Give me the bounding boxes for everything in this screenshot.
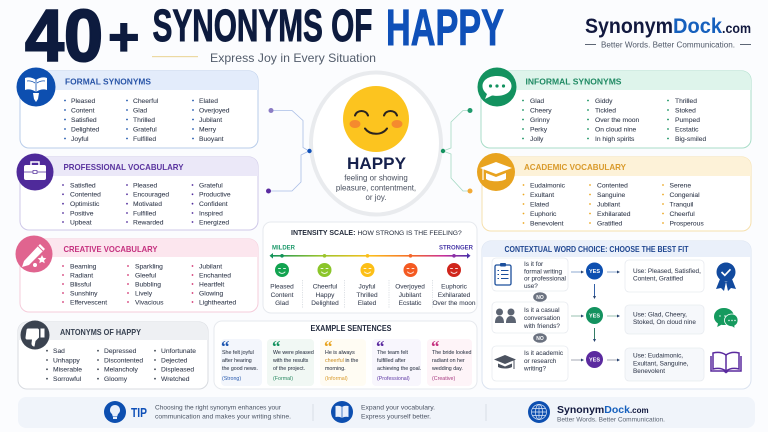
word list: creative: Enchanted xyxy=(199,272,231,279)
word list: academic: Contented xyxy=(597,182,628,189)
connector lines: left xyxy=(266,108,312,194)
word list: professional: Pleased xyxy=(133,182,157,189)
word list: formal: Delighted xyxy=(71,126,100,133)
flow arrows xyxy=(571,270,620,362)
word list: professional: Satisfied xyxy=(70,182,96,189)
word list: creative: Glowing xyxy=(199,290,223,297)
word list: formal: Pleased xyxy=(71,98,95,105)
sentence card: informal xyxy=(320,337,366,386)
panel: academic vocabulary xyxy=(477,153,751,231)
sentence card: strong xyxy=(221,337,262,386)
sentence card: strong: “ xyxy=(221,337,230,356)
panel: contextual word choice xyxy=(482,241,751,389)
heading: creative vocabulary: CREATIVE VOCABULARY xyxy=(64,245,158,254)
word list: academic: Sanguine xyxy=(597,192,626,199)
word list: informal: Tickled xyxy=(595,107,616,114)
word list: formal: Satisfied xyxy=(71,117,97,124)
word list: informal: Stoked xyxy=(675,107,696,114)
intensity words xyxy=(270,284,476,307)
word list: formal: Fulfilled xyxy=(133,136,156,143)
question text: Is it a casual xyxy=(524,307,560,314)
result text: Benevolent xyxy=(633,368,665,375)
result text xyxy=(633,268,701,375)
word list: creative: Sunshiny xyxy=(70,290,98,297)
sentence card: professional: (Professional) xyxy=(377,376,410,382)
gradient scale line xyxy=(270,253,470,259)
word list: antonyms: Discontented xyxy=(104,357,143,364)
heading: professional vocabulary: PROFESSIONAL VOCABULARY xyxy=(64,163,184,172)
word list: creative: Blissful xyxy=(70,281,92,288)
sentence card: formal: (Formal) xyxy=(273,376,293,382)
result text: Stoked, On cloud nine xyxy=(633,319,696,326)
word list: formal: Thrilled xyxy=(133,117,155,124)
result text: Use: Pleased, Satisfied, xyxy=(633,268,701,275)
icon: people xyxy=(495,308,516,323)
sentence card: informal: He is always xyxy=(325,350,355,356)
intensity words: Glad xyxy=(275,300,289,307)
sentence card: creative: radiant on her xyxy=(432,358,465,364)
word list: creative: Lighthearted xyxy=(199,299,236,306)
icon: pencil and stars xyxy=(16,236,52,272)
panel: informal synonyms xyxy=(478,68,751,148)
footer logo: Better Words. Better Communication. xyxy=(557,416,665,424)
word list: professional: Upbeat xyxy=(70,219,92,226)
footer logo xyxy=(528,401,665,424)
expand your vocabulary: Expand your vocabulary. xyxy=(361,404,435,412)
intensity words: Ecstatic xyxy=(399,300,422,307)
icon: medal xyxy=(716,262,736,291)
title: synonyms of happy: SYNONYMS OF xyxy=(152,0,372,51)
word list: informal: Over the moon xyxy=(595,117,640,124)
word list: antonyms: Sorrowful xyxy=(53,376,82,383)
word list: informal xyxy=(523,98,706,143)
tip: communication and makes your writing shine. xyxy=(155,414,291,420)
word list: creative: Beaming xyxy=(70,263,97,270)
sentence card: informal: morning. xyxy=(325,366,346,372)
icon: thumbs down xyxy=(20,320,50,350)
word list: antonyms: Unhappy xyxy=(53,357,80,364)
icon: chat bubbles xyxy=(714,308,738,329)
word list: formal: Overjoyed xyxy=(199,107,230,114)
definition: or joy. xyxy=(366,193,386,202)
word list: antonyms: Depressed xyxy=(104,348,137,355)
word list: formal: Cheerful xyxy=(133,98,159,105)
tip: Choosing the right synonym enhances your xyxy=(155,404,282,412)
sentence card: strong: after hearing xyxy=(222,358,252,364)
word list: antonyms: Unfortunate xyxy=(161,348,196,355)
word list: informal: Jolly xyxy=(530,136,544,143)
question text: or professional xyxy=(524,276,566,282)
word list: academic: Jubilant xyxy=(597,201,620,208)
intensity words: Happy xyxy=(316,292,335,299)
center circle: happy xyxy=(311,72,441,214)
sentence card: professional: The team felt xyxy=(377,350,408,356)
icon: speech bubble xyxy=(478,68,516,106)
word list: formal: Content xyxy=(71,107,95,114)
word list: academic: Benevolent xyxy=(530,220,564,227)
sentence card: professional xyxy=(372,337,421,386)
word list: creative: Gleeful xyxy=(135,272,157,279)
word list: informal: On cloud nine xyxy=(595,126,637,133)
word list: academic: Serene xyxy=(670,182,691,189)
result text: Use: Eudaimonic, xyxy=(633,352,683,360)
word list: formal: Glad xyxy=(133,107,147,114)
tip xyxy=(104,401,291,423)
icon: open book xyxy=(16,68,56,106)
intensity words: Jubilant xyxy=(399,292,421,299)
word list: academic: Euphoric xyxy=(530,211,557,218)
word list: formal: Buoyant xyxy=(199,136,224,143)
question text xyxy=(523,261,566,372)
heading: academic vocabulary: ACADEMIC VOCABULARY xyxy=(524,163,627,172)
word list: professional xyxy=(63,182,231,226)
intensity words: Pleased xyxy=(270,284,294,290)
definition xyxy=(336,174,416,202)
sentence card: formal: We were pleased xyxy=(273,350,314,356)
sentence card: formal xyxy=(267,337,314,386)
word list: professional: Fulfilled xyxy=(133,210,156,217)
heading: contextual word choice: CONTEXTUAL WORD CHOICE: CHOOSE THE BEST FIT xyxy=(504,245,689,254)
sentence card: creative: wedding day. xyxy=(432,366,463,372)
icon: graduation cap dark xyxy=(494,355,516,369)
scale labels: MILDER xyxy=(272,246,296,252)
sentence card: informal: cheerful in the xyxy=(325,358,358,364)
word list: creative: Effervescent xyxy=(70,299,107,306)
word list: informal: Cheery xyxy=(530,107,552,114)
sentence card: formal: with the results xyxy=(273,358,309,364)
intensity words: Content xyxy=(271,292,294,299)
heading: informal synonyms: INFORMAL SYNONYMS xyxy=(526,78,622,86)
word list: professional: Rewarded xyxy=(133,219,164,226)
intensity words: Euphoric xyxy=(441,284,468,290)
no badges: NO xyxy=(536,336,544,342)
word list: informal: Perky xyxy=(530,126,548,133)
word list: professional: Productive xyxy=(199,192,231,199)
no badges: NO xyxy=(536,295,544,301)
question text: Is it for xyxy=(524,261,544,268)
heading: example sentences: EXAMPLE SENTENCES xyxy=(310,324,392,333)
word list: academic: Exhilarated xyxy=(597,211,631,218)
yes circles xyxy=(586,262,603,368)
no badges xyxy=(533,292,547,343)
word list: academic: Elated xyxy=(530,201,549,208)
word list: antonyms: Dejected xyxy=(161,357,188,364)
word list: informal: Thrilled xyxy=(675,98,697,105)
intensity words: Thrilled xyxy=(356,292,378,299)
intensity words: Elated xyxy=(358,300,377,307)
question text: or research xyxy=(524,358,557,365)
icon: briefcase xyxy=(16,154,54,190)
panel: creative vocabulary xyxy=(16,236,258,312)
word list: professional: Contented xyxy=(70,192,101,199)
word list: informal: Ecstatic xyxy=(675,126,699,133)
intensity words: Exhilarated xyxy=(438,292,471,299)
panel: example sentences xyxy=(214,321,477,389)
sentence card: creative: The bride looked xyxy=(432,350,472,356)
sentence card: strong: (Strong) xyxy=(222,376,241,382)
tip: TIP xyxy=(131,405,147,420)
intensity words: Cheerful xyxy=(313,284,338,290)
word list: informal: Pumped xyxy=(675,117,700,124)
word list: creative xyxy=(63,263,236,306)
yes circles: YES xyxy=(589,269,600,275)
intensity words: Joyful xyxy=(359,284,376,290)
word list: academic: Eudaimonic xyxy=(530,182,566,189)
question text: Is it academic xyxy=(524,350,564,357)
word list: academic: Prosperous xyxy=(670,220,704,227)
intensity words: Overjoyed xyxy=(395,284,425,290)
subtitle: Express Joy in Every Situation xyxy=(210,51,376,65)
connector lines: right xyxy=(441,108,472,194)
sentence card: creative xyxy=(427,337,472,386)
sentence card: professional: “ xyxy=(376,337,384,356)
heading: happy: HAPPY xyxy=(347,154,407,173)
sentence card: professional: achieving the goal. xyxy=(377,366,421,372)
sentence card: informal: “ xyxy=(324,337,332,356)
word list: antonyms: Miserable xyxy=(53,367,82,374)
word list: antonyms: Melancholy xyxy=(104,367,138,374)
word list: professional: Confident xyxy=(199,201,228,208)
word list: antonyms: Wretched xyxy=(161,376,190,383)
word list: academic: Congenial xyxy=(670,192,700,199)
sentence card: professional: fulfilled after xyxy=(377,358,406,364)
footer band xyxy=(18,397,755,428)
word list: informal: In high spirits xyxy=(595,136,635,143)
heading: intensity scale: INTENSITY SCALE: HOW STRONG IS THE FEELING? xyxy=(291,230,462,237)
footer logo: SynonymDock.com xyxy=(557,404,649,416)
panel: professional vocabulary xyxy=(16,154,258,230)
icon: smiley face xyxy=(343,86,409,152)
heading: formal synonyms: FORMAL SYNONYMS xyxy=(65,78,152,86)
word list: professional: Grateful xyxy=(199,182,223,189)
word list: professional: Motivated xyxy=(133,201,162,208)
intensity faces xyxy=(275,263,461,277)
logo: SynonymDock.com: .com xyxy=(722,20,751,36)
word list: academic: Tranquil xyxy=(670,201,694,208)
word list: professional: Inspired xyxy=(199,210,223,217)
yes circles: YES xyxy=(589,314,600,320)
word list: informal: Big-smiled xyxy=(675,136,706,143)
result text: Content, Gratified xyxy=(633,276,684,282)
word list: academic: Exultant xyxy=(530,192,554,199)
sentence card: creative: “ xyxy=(431,337,440,356)
word list: academic: Cheerful xyxy=(670,211,695,218)
intensity words: Delighted xyxy=(311,300,339,307)
heading: antonyms: ANTONYMS OF HAPPY xyxy=(60,327,141,337)
word list: professional: Positive xyxy=(70,210,94,217)
word list: creative: Jubilant xyxy=(199,263,222,270)
yes circles: YES xyxy=(589,358,600,364)
word list: formal: Merry xyxy=(199,126,217,133)
expand your vocabulary: Express yourself better. xyxy=(361,414,431,420)
icon: graduation cap xyxy=(477,153,515,191)
logo: SynonymDock.com: Better Words. Better Communication. xyxy=(601,40,735,50)
word list: antonyms: Sad xyxy=(53,348,65,355)
sentence card: strong: She felt joyful xyxy=(222,350,254,356)
title: 40+: + xyxy=(108,7,140,67)
word list: antonyms: Gloomy xyxy=(104,376,128,383)
sentence card: informal: (Informal) xyxy=(325,376,348,382)
expand your vocabulary xyxy=(331,401,435,423)
question text: formal writing xyxy=(524,268,562,276)
title: synonyms of happy: HAPPY xyxy=(386,0,504,56)
intensity words: Over the moon xyxy=(432,300,476,307)
question boxes xyxy=(492,258,568,381)
question text: writing? xyxy=(523,366,546,372)
definition: pleasure, contentment, xyxy=(336,183,416,192)
logo: SynonymDock.com xyxy=(585,15,751,50)
result text: Exultant, Sanguine, xyxy=(633,360,689,368)
icon: clipboard xyxy=(495,263,511,285)
word list: academic xyxy=(524,182,704,227)
word list: informal: Glad xyxy=(530,98,544,105)
word list: formal: Jubilant xyxy=(199,117,222,124)
question text: use? xyxy=(524,283,538,290)
word list: formal: Elated xyxy=(199,98,218,105)
word list: antonyms xyxy=(47,348,196,383)
word list: formal: Joyful xyxy=(71,136,89,143)
sentence card: strong: the good news. xyxy=(222,366,258,372)
scale labels: STRONGER xyxy=(439,246,474,252)
word list: professional: Encouraged xyxy=(133,192,169,199)
word list: professional: Energized xyxy=(199,219,229,226)
result boxes xyxy=(625,260,704,381)
word list: antonyms: Displeased xyxy=(161,367,194,374)
scale labels xyxy=(272,246,474,252)
question text: with friends? xyxy=(523,323,560,330)
definition: feeling or showing xyxy=(344,174,408,182)
sentence card: formal: “ xyxy=(272,337,280,356)
result text: Use: Glad, Cheery, xyxy=(633,312,687,318)
panel: antonyms of happy xyxy=(18,320,208,389)
sentence card: formal: of the project. xyxy=(273,366,305,372)
word list: professional: Optimistic xyxy=(70,201,100,208)
word list: creative: Sparkling xyxy=(135,263,163,270)
word list: creative: Vivacious xyxy=(135,299,164,306)
word list: creative: Lively xyxy=(135,290,153,297)
icon: purple book xyxy=(711,352,741,372)
word list: creative: Bubbling xyxy=(135,281,161,288)
sentence card: creative: (Creative) xyxy=(432,376,455,382)
panel: intensity scale xyxy=(263,222,477,313)
logo: SynonymDock.com: Synonym xyxy=(585,15,673,38)
word list: informal: Giddy xyxy=(595,98,613,105)
question text: conversation xyxy=(524,315,561,322)
word list: academic: Gratified xyxy=(597,220,623,227)
word list: informal: Grinny xyxy=(530,117,550,124)
panel: formal synonyms xyxy=(16,68,258,148)
word list: creative: Heartfelt xyxy=(199,281,224,288)
logo: SynonymDock.com: Dock xyxy=(673,15,722,38)
word list: formal xyxy=(65,98,230,143)
word list: formal: Grateful xyxy=(133,126,157,133)
word list: creative: Radiant xyxy=(70,272,93,279)
